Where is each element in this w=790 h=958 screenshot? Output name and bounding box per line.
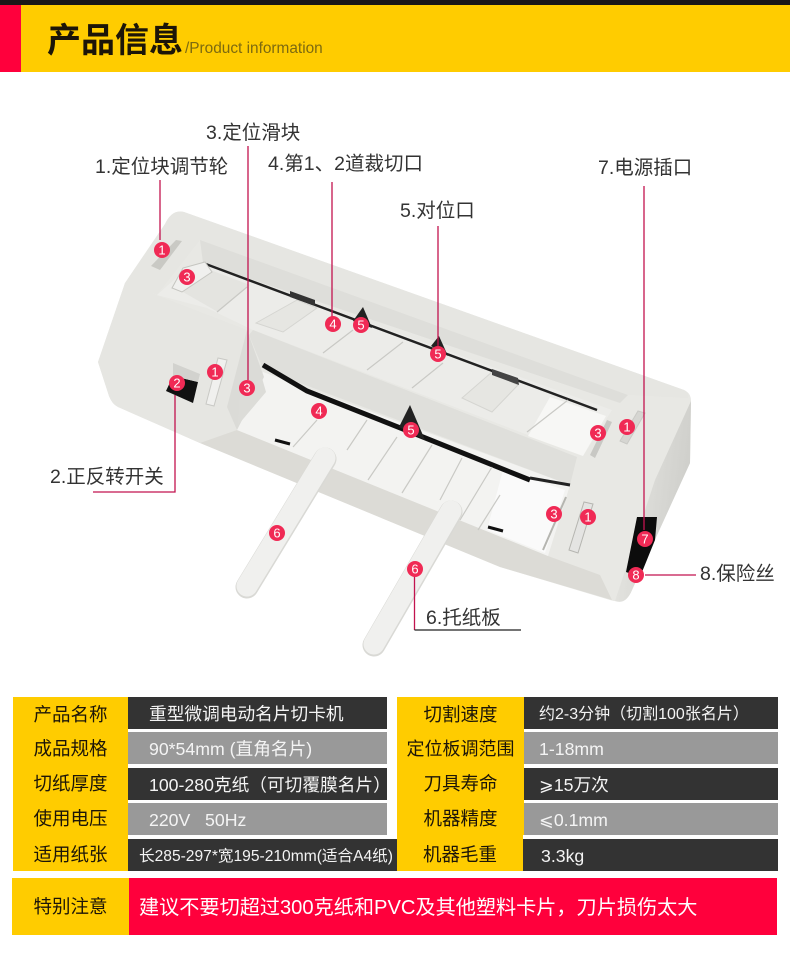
specification table: ⩾15万次: [539, 775, 609, 795]
callout labels: [50, 122, 775, 629]
row: 刀具寿命: 刀具寿命: [423, 773, 498, 794]
specification table: 长285-297*宽195-210mm(适合A4纸): [139, 848, 393, 865]
numbered badges: 6: [273, 526, 281, 541]
specification table: [13, 697, 778, 871]
adjustment wheels: [151, 240, 182, 270]
row: 适用纸张: [13, 835, 128, 871]
notice label: 特别注意: [33, 896, 108, 917]
row: 定位板调范围: 定位板调范围: [406, 739, 514, 759]
left wall of front tray: [227, 330, 264, 430]
heading: 产品信息: [47, 22, 183, 60]
specification table: 90*54mm (直角名片): [149, 739, 312, 759]
power socket: [626, 517, 657, 577]
specification table: 约2-3分钟（切割100张名片）: [539, 706, 749, 723]
positioning sliders: [172, 262, 212, 292]
numbered badges: [154, 242, 653, 583]
callout labels: 7.电源插口: [598, 157, 692, 179]
rear tray ribs: [217, 287, 568, 432]
row: 成品规格: 成品规格: [33, 738, 108, 759]
numbered badges: 6: [411, 562, 419, 577]
right chamfer: [615, 401, 691, 602]
top deck highlight: [200, 240, 628, 403]
callout labels: 4.第1、2道裁切口: [268, 153, 423, 175]
left face shade: [98, 283, 247, 443]
row: 机器毛重: 机器毛重: [423, 844, 497, 865]
notice text: 建议不要切超过300克纸和PVC及其他塑料卡片，刀片损伤太大: [139, 897, 697, 919]
numbered badges: 5: [357, 318, 365, 333]
english subheading: /Product information: [185, 40, 323, 57]
front tray: [237, 372, 570, 556]
numbered badges: 2: [173, 376, 181, 391]
row: 切割速度: [397, 697, 524, 729]
numbered badges: 3: [594, 426, 602, 441]
front lip: [160, 425, 612, 600]
numbered badges: 5: [434, 347, 442, 362]
specification table: 1-18mm: [539, 739, 604, 759]
callout labels: 1.定位块调节轮: [95, 156, 228, 178]
notice label: [12, 878, 129, 935]
row: 切割速度: 切割速度: [423, 704, 498, 725]
positioning notches: [353, 307, 372, 328]
slot marks: [275, 440, 503, 531]
notice text: [129, 878, 777, 935]
upper deck: [125, 212, 688, 398]
header band: [0, 0, 790, 72]
machine body: [98, 212, 691, 602]
numbered badges: 7: [641, 532, 649, 547]
numbered badges: 1: [623, 420, 631, 435]
product diagram: [50, 122, 775, 656]
row: 机器精度: 机器精度: [423, 808, 498, 829]
specification table: 3.3kg: [541, 846, 584, 866]
red accent block: [0, 5, 21, 72]
middle bridge: [249, 330, 577, 485]
row: 适用纸张: 适用纸张: [33, 844, 108, 865]
callout labels: 5.对位口: [400, 200, 475, 222]
row: 使用电压: 使用电压: [33, 808, 108, 829]
body silhouette: [98, 212, 691, 601]
numbered badges: 1: [211, 365, 219, 380]
left switch: [166, 376, 198, 403]
row: 切纸厚度: [13, 765, 128, 800]
callout lines: [93, 146, 696, 630]
numbered badges: 4: [329, 317, 337, 332]
specification table: 220V 50Hz: [149, 810, 246, 830]
special notice: [12, 878, 777, 935]
callout labels: 8.保险丝: [700, 563, 775, 585]
specification table: ⩽0.1mm: [539, 810, 608, 830]
callout labels: 6.托纸板: [426, 607, 501, 629]
row: 机器毛重: [397, 835, 523, 871]
rear cutting slot: [203, 263, 597, 410]
specification table: 重型微调电动名片切卡机: [149, 704, 344, 724]
top black strip: [0, 0, 790, 5]
front cutting slot: [263, 365, 530, 480]
numbered badges: 5: [407, 423, 415, 438]
row: 产品名称: [13, 697, 128, 729]
row: 机器精度: [397, 800, 524, 835]
numbered badges: 8: [632, 568, 640, 583]
row: 刀具寿命: [397, 765, 524, 800]
rear tray floor: [157, 263, 612, 456]
callout labels: 2.正反转开关: [50, 466, 164, 488]
numbered badges: 4: [315, 404, 323, 419]
row: 成品规格: [13, 729, 128, 765]
specification table: 100-280克纸（可切覆膜名片）: [149, 775, 391, 795]
rear paper stop: [256, 300, 317, 332]
row: 使用电压: [13, 800, 128, 835]
row: 定位板调范围: [397, 729, 524, 765]
front tray ribs: [293, 420, 500, 530]
numbered badges: 3: [183, 270, 191, 285]
paper support paddles: [247, 458, 451, 645]
row: 切纸厚度: 切纸厚度: [33, 773, 108, 794]
numbered badges: 3: [243, 381, 251, 396]
row: 产品名称: 产品名称: [33, 704, 108, 725]
callout labels: 3.定位滑块: [206, 122, 300, 144]
numbered badges: 1: [158, 243, 166, 258]
numbered badges: 1: [584, 510, 592, 525]
numbered badges: 3: [550, 507, 558, 522]
